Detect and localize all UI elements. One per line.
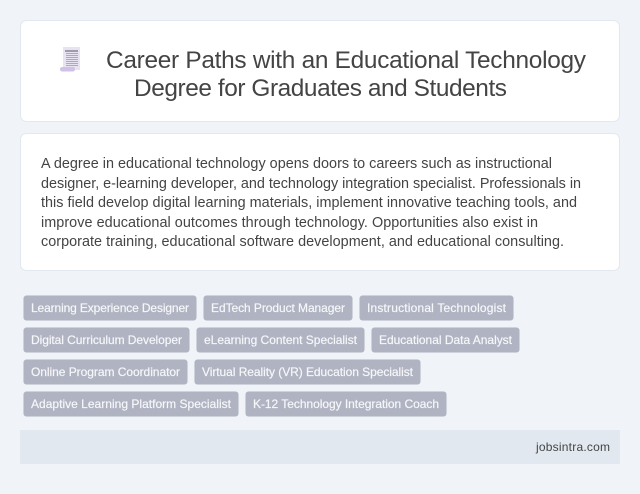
tag: Educational Data Analyst [372,328,520,352]
heading [106,47,587,102]
tag: Learning Experience Designer [24,296,196,320]
text block: description: A degree in educational technology opens doors to careers such as instructional [41,156,552,172]
tag: Adaptive Learning Platform Specialist [24,392,238,416]
tag: Virtual Reality (VR) Education Specialist [194,360,420,384]
panel: title header [20,20,620,122]
text block: description: improve educational outcomes through technology. Opportunities also exist in [41,215,538,231]
tag: Adaptive Learning Platform Specialist: Adaptive Learning Platform Specialist [31,397,232,411]
tag list [24,296,520,416]
panel: description [20,134,620,270]
tag: K-12 Technology Integration Coach [246,392,446,416]
tag: Digital Curriculum Developer [24,328,190,352]
text block: description: this field develop digital learning materials, implement innovative teaching tools, and [41,195,577,211]
tag: eLearning Content Specialist: eLearning Content Specialist [204,333,358,347]
tag: Learning Experience Designer: Learning Experience Designer [31,301,189,315]
text block: description: designer, e-learning developer, and technology integration specialist. Professionals in [41,176,581,192]
footer bar [20,430,620,464]
tag: Educational Data Analyst: Educational Data Analyst [379,333,513,347]
tag: Online Program Coordinator [24,360,188,384]
text block: description: corporate training, educational software development, and educational consulting. [41,234,564,250]
tag: Instructional Technologist [360,296,514,320]
heading: Career Paths with an Educational Technology [106,47,587,74]
heading: Degree for Graduates and Students [134,75,507,102]
text block: description [41,156,581,250]
icon: document scroll [60,47,80,72]
tag: Digital Curriculum Developer: Digital Curriculum Developer [31,333,182,347]
tag: Instructional Technologist: Instructional Technologist [367,301,507,315]
tag: Online Program Coordinator: Online Program Coordinator [31,365,180,379]
footer source text: jobsintra.com [535,440,610,454]
tag: EdTech Product Manager [204,296,352,320]
tag: eLearning Content Specialist [196,328,364,352]
tag: EdTech Product Manager: EdTech Product Manager [211,301,345,315]
tag: K-12 Technology Integration Coach: K-12 Technology Integration Coach [253,397,439,411]
tag: Virtual Reality (VR) Education Specialist: Virtual Reality (VR) Education Specialist [202,365,414,379]
